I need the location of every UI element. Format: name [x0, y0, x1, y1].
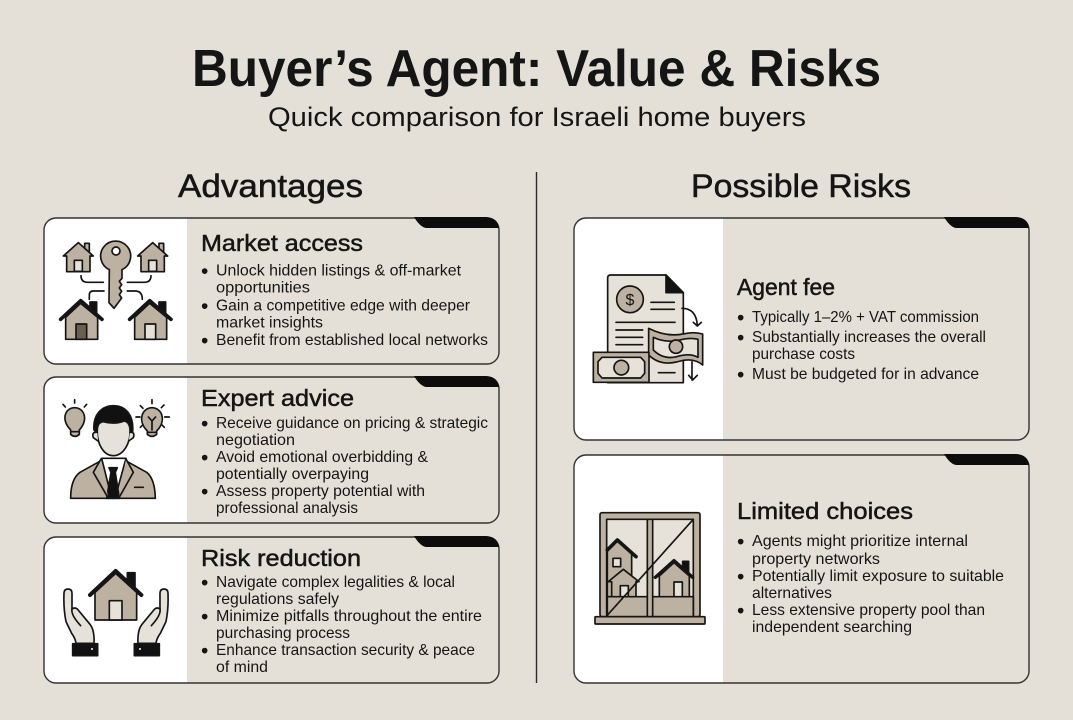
bullet list: Avoid emotional overbidding & [216, 449, 428, 466]
bullet list: • [201, 480, 208, 504]
bullet list: purchasing process [216, 625, 350, 642]
heading: Limited choices [737, 498, 913, 524]
bullet list: • [201, 572, 208, 594]
bullet list: • [201, 412, 208, 436]
heading: Expert advice [201, 385, 354, 411]
bullet list: • [201, 640, 208, 662]
bullet list: opportunities [216, 280, 310, 296]
bullet list: • [201, 330, 208, 352]
bullet list: Receive guidance on pricing & strategic [216, 415, 488, 432]
bullet list: • [201, 260, 208, 283]
bullet list [201, 260, 488, 352]
bullet list: Substantially increases the overall [752, 329, 986, 346]
heading: advantages: Advantages [178, 168, 363, 204]
heading: Agent fee [737, 274, 835, 300]
panel: limited choices [574, 454, 1029, 683]
bullet list: of mind [216, 659, 268, 676]
bullet list: independent searching [752, 619, 912, 636]
bullet list: • [201, 606, 208, 628]
icon: hands protecting house [64, 571, 168, 656]
bullet list: Less extensive property pool than [752, 602, 985, 619]
bullet list: • [737, 600, 744, 622]
bullet list: professional analysis [216, 500, 358, 517]
bullet list: Gain a competitive edge with deeper [216, 298, 470, 314]
bullet list: Agents might prioritize internal [752, 533, 968, 550]
bullet list [201, 572, 482, 676]
bullet list: potentially overpaying [216, 466, 369, 483]
bullet list [737, 306, 986, 386]
subtitle: Quick comparison for Israeli home buyers [268, 102, 806, 132]
bullet list: Enhance transaction security & peace [216, 642, 475, 659]
bullet list: negotiation [216, 432, 295, 449]
bullet list: Minimize pitfalls throughout the entire [216, 608, 482, 625]
bullet list [737, 530, 1004, 636]
icon: invoice and banknotes: $ [626, 292, 635, 309]
heading: Risk reduction [201, 545, 361, 571]
icon: key and houses [61, 241, 171, 339]
bullet list: regulations safely [216, 591, 339, 608]
panel: agent fee [574, 217, 1029, 440]
bullet list: Benefit from established local networks [216, 332, 488, 349]
title: Buyer’s Agent: Value & Risks [192, 40, 881, 98]
bullet list: purchase costs [752, 346, 855, 363]
bullet list: property networks [752, 551, 880, 568]
bullet list: Typically 1–2% + VAT commission [752, 309, 979, 326]
icon: invoice and banknotes [593, 275, 703, 383]
bullet list: • [737, 566, 744, 588]
bullet list: Unlock hidden listings & off-market [216, 262, 462, 280]
bullet list: • [201, 446, 208, 470]
bullet list: • [737, 364, 744, 386]
heading: possible risks: Possible Risks [691, 168, 911, 204]
icon: window with houses [595, 513, 705, 624]
panel: expert advice [44, 376, 499, 523]
bullet list: Must be budgeted for in advance [752, 366, 979, 383]
panel: risk reduction [44, 536, 499, 683]
panel: market access [44, 217, 499, 364]
bullet list: • [737, 530, 744, 554]
bullet list: Potentially limit exposure to suitable [752, 568, 1004, 585]
bullet list: • [737, 306, 744, 330]
bullet list: • [737, 326, 744, 350]
icon: advisor with light bulbs [63, 400, 169, 498]
bullet list [201, 412, 488, 517]
bullet list: Assess property potential with [216, 483, 425, 500]
bullet list: market insights [216, 314, 323, 332]
heading: Market access [201, 230, 363, 256]
bullet list: alternatives [752, 585, 832, 602]
bullet list: Navigate complex legalities & local [216, 574, 455, 591]
bullet list: • [201, 295, 208, 318]
